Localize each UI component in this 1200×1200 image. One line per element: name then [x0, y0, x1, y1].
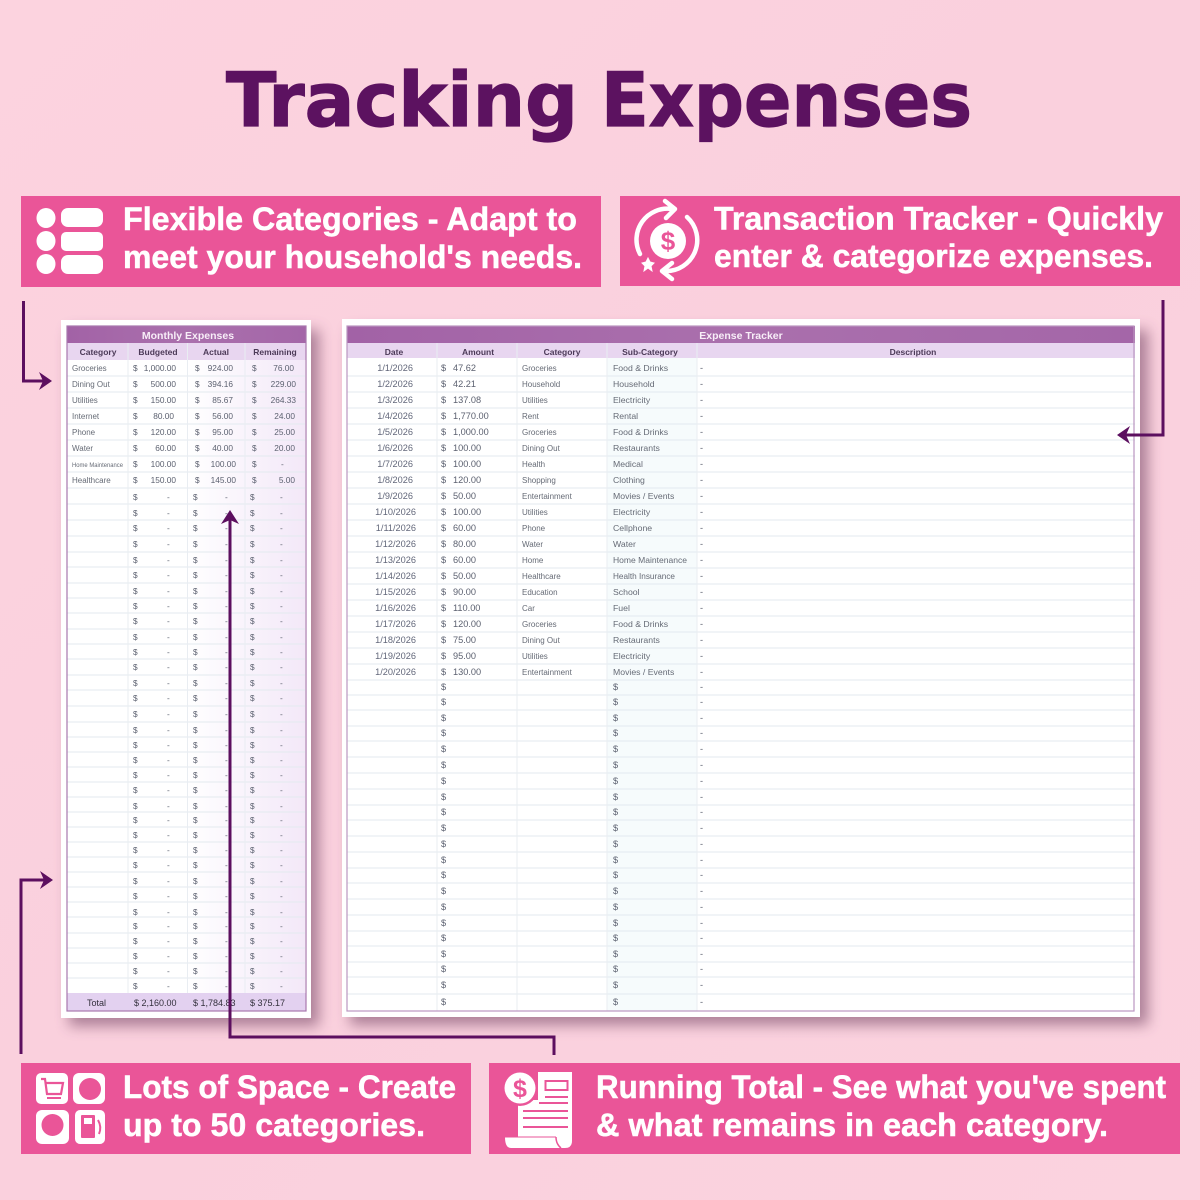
table rows: transactions: Utilities	[522, 508, 548, 517]
table rows: empty transaction slots: $$-	[441, 870, 703, 880]
banner text: lots of space: Lots of Space - Create	[123, 1069, 456, 1105]
table rows: transactions: 130.00	[453, 667, 481, 677]
arrow: lots of space to monthly table	[21, 871, 53, 1054]
table rows: transactions: Electricity	[613, 651, 651, 661]
table rows: transactions: -	[700, 555, 703, 565]
table rows: categories with amounts: 394.16	[208, 379, 233, 389]
table rows: transactions: $	[441, 587, 446, 597]
table rows: transactions: Restaurants	[613, 635, 660, 645]
table rows: empty transaction slots: $$-	[441, 933, 703, 943]
table rows: empty category slots: $-$-$-	[133, 936, 283, 946]
table rows: categories with amounts: $$$	[133, 443, 257, 453]
table rows: transactions: Household	[613, 379, 655, 389]
table rows: transactions: 1/18/2026	[375, 635, 416, 645]
table rows: categories with amounts: Healthcare	[72, 476, 111, 485]
panel: monthly expenses table	[61, 320, 319, 1026]
table rows: transactions: Food & Drinks	[613, 619, 669, 629]
panel: running total banner	[489, 1063, 1180, 1154]
table rows: transactions: -	[700, 411, 703, 421]
table rows: transactions: $	[441, 379, 446, 389]
table rows: categories with amounts: 100.00	[211, 459, 236, 469]
table rows: transactions: $	[441, 363, 446, 373]
table rows: empty category slots: $-$-$-	[133, 678, 283, 688]
table rows: transactions: -	[700, 443, 703, 453]
table rows: transactions: -	[700, 507, 703, 517]
banner text: transaction tracker	[714, 200, 1163, 274]
table rows: categories with amounts: Internet	[72, 412, 100, 421]
table rows: transactions: 1/13/2026	[375, 555, 416, 565]
icon: receipt with coin: $	[513, 1075, 527, 1103]
table rows: categories with amounts: 25.00	[274, 427, 295, 437]
table rows: transactions: 1/12/2026	[375, 539, 416, 549]
table rows: transactions: 1/11/2026	[376, 523, 416, 533]
table rows: categories with amounts	[72, 363, 296, 485]
table rows: empty category slots: $-$-$-	[133, 876, 283, 886]
table rows: empty transaction slots: $$-	[441, 997, 703, 1007]
banner text: running total	[596, 1069, 1166, 1143]
table rows: empty category slots	[133, 492, 283, 991]
banner text: lots of space: up to 50 categories.	[123, 1107, 425, 1143]
table rows: transactions: 100.00	[453, 443, 481, 453]
table rows: transactions: 80.00	[453, 539, 476, 549]
table rows: empty transaction slots: $$-	[441, 886, 703, 896]
table rows: transactions: $	[441, 667, 446, 677]
table rows: categories with amounts: $$$-	[133, 459, 284, 469]
table rows: empty category slots: $-$-$-	[133, 662, 283, 672]
table rows: categories with amounts: 60.00	[155, 443, 176, 453]
table rows: transactions: Fuel	[613, 603, 630, 613]
panel: flexible categories banner	[21, 196, 601, 287]
table rows: categories with amounts: 150.00	[151, 395, 176, 405]
banner text: running total: Running Total - See what you've spent	[596, 1069, 1166, 1105]
icon: circular dollar arrows	[636, 201, 697, 279]
table rows: categories with amounts: Utilities	[72, 396, 98, 405]
table rows: empty transaction slots: $$-	[441, 697, 703, 707]
table rows: transactions: -	[700, 635, 703, 645]
table header row: Category	[80, 347, 117, 357]
table rows: transactions: 1/6/2026	[377, 443, 413, 453]
table header row	[67, 343, 306, 360]
table rows: transactions: $	[441, 523, 446, 533]
table rows: empty category slots: $-$-$-	[133, 830, 283, 840]
table rows: categories with amounts: 150.00	[151, 475, 176, 485]
table rows: transactions: -	[700, 363, 703, 373]
banner text: flexible categories: Flexible Categories - Adapt to	[123, 201, 577, 237]
table rows: transactions: 1/17/2026	[375, 619, 416, 629]
table rows: transactions: -	[700, 539, 703, 549]
table rows: transactions: 95.00	[453, 651, 476, 661]
table rows: transactions: 1/7/2026	[377, 459, 413, 469]
table rows: categories with amounts: 264.33	[271, 395, 296, 405]
banner text: running total: & what remains in each category.	[596, 1107, 1108, 1143]
table rows: transactions: Health	[522, 460, 545, 469]
table rows: empty transaction slots: $$-	[441, 980, 703, 990]
table rows: transactions: -	[700, 379, 703, 389]
icon: list	[36, 208, 103, 274]
table rows: empty category slots: $-$-$-	[133, 693, 283, 703]
table rows: transactions: Restaurants	[613, 443, 660, 453]
panel: expense tracker table	[342, 319, 1148, 1025]
table rows: transactions: 1/8/2026	[377, 475, 413, 485]
table title: expense tracker: Expense Tracker	[699, 330, 783, 342]
table rows: transactions: School	[613, 587, 640, 597]
title: Tracking	[226, 56, 578, 144]
table rows: transactions: -	[700, 427, 703, 437]
table rows: transactions: -	[700, 491, 703, 501]
table rows: categories with amounts: 120.00	[151, 427, 176, 437]
table rows: transactions: 1/2/2026	[377, 379, 413, 389]
table rows: transactions: 120.00	[453, 619, 481, 629]
table total row: Total	[87, 998, 106, 1008]
table rows: empty transaction slots	[441, 682, 703, 1007]
table rows: empty category slots: $-$-$-	[133, 815, 283, 825]
title	[226, 56, 972, 144]
table rows: empty category slots: $-$-$-	[133, 740, 283, 750]
table rows: empty transaction slots: $$-	[441, 964, 703, 974]
table rows: transactions: Electricity	[613, 395, 651, 405]
table rows: categories with amounts: Water	[72, 444, 93, 453]
table rows: transactions: 1,000.00	[453, 427, 489, 437]
table rows: categories with amounts: $$$	[133, 379, 257, 389]
table rows: transactions: 60.00	[453, 555, 476, 565]
table rows: transactions: Dining Out	[522, 444, 561, 453]
table rows: transactions: -	[700, 603, 703, 613]
table rows: empty transaction slots: $$-	[441, 744, 703, 754]
table rows: categories with amounts: 100.00	[151, 459, 176, 469]
table rows: transactions: Electricity	[613, 507, 651, 517]
table rows: categories with amounts: 76.00	[273, 363, 294, 373]
table header row: Category	[544, 347, 581, 357]
table rows: transactions: -	[700, 395, 703, 405]
table rows: empty transaction slots: $$-	[441, 807, 703, 817]
table rows: categories with amounts: $$$	[133, 411, 257, 421]
table rows: transactions: -	[700, 571, 703, 581]
table rows: empty transaction slots: $$-	[441, 792, 703, 802]
table rows: transactions: Groceries	[522, 428, 557, 437]
table rows: transactions	[375, 363, 703, 677]
table rows: transactions: Medical	[613, 459, 643, 469]
table rows: empty transaction slots: $$-	[441, 902, 703, 912]
banner text: flexible categories	[123, 201, 582, 275]
table rows: transactions: Clothing	[613, 475, 645, 485]
table rows: empty category slots: $-$-$-	[133, 860, 283, 870]
table rows: transactions: 120.00	[453, 475, 481, 485]
table rows: transactions: $	[441, 443, 446, 453]
table rows: transactions: 1/1/2026	[377, 363, 413, 373]
table rows: empty category slots: $-$-$-	[133, 891, 283, 901]
table rows: transactions: 60.00	[453, 523, 476, 533]
table rows: transactions: $	[441, 603, 446, 613]
table rows: empty transaction slots: $$-	[441, 918, 703, 928]
table rows: transactions: Utilities	[522, 396, 548, 405]
table rows: transactions: 42.21	[453, 379, 476, 389]
table rows: transactions: 1/3/2026	[377, 395, 413, 405]
table title: monthly expenses	[67, 326, 306, 343]
table rows: transactions: Shopping	[522, 476, 556, 485]
table rows: categories with amounts: 924.00	[208, 363, 233, 373]
table total row: $ 2,160.00	[134, 998, 177, 1008]
table rows: transactions: Home Maintenance	[613, 555, 687, 565]
table rows: transactions: $	[441, 459, 446, 469]
table title: monthly expenses: Monthly Expenses	[142, 330, 234, 342]
table rows: transactions: $	[441, 571, 446, 581]
table rows: empty transaction slots: $$-	[441, 949, 703, 959]
table rows: empty category slots: $-$-$-	[133, 570, 283, 580]
table rows: empty category slots: $-$-$-	[133, 492, 283, 502]
table rows: transactions: -	[700, 459, 703, 469]
table rows: empty category slots: $-$-$-	[133, 647, 283, 657]
table rows: transactions: -	[700, 619, 703, 629]
table rows: empty category slots: $-$-$-	[133, 508, 283, 518]
table rows: categories with amounts: 1,000.00	[144, 363, 176, 373]
table rows: transactions: 1/15/2026	[375, 587, 416, 597]
table rows: transactions: 1/4/2026	[377, 411, 413, 421]
table rows: transactions: $	[441, 619, 446, 629]
table rows: empty category slots: $-$-$-	[133, 785, 283, 795]
table rows: categories with amounts: 24.00	[274, 411, 295, 421]
title: Expenses	[601, 56, 972, 144]
table rows: transactions: Water	[522, 540, 543, 549]
table rows: categories with amounts: 85.67	[212, 395, 233, 405]
table rows: empty category slots: $-$-$-	[133, 601, 283, 611]
table rows: transactions: 1/20/2026	[375, 667, 416, 677]
table rows: transactions: $	[441, 635, 446, 645]
table rows: transactions: $	[441, 475, 446, 485]
table rows: categories with amounts: 56.00	[212, 411, 233, 421]
table rows: empty category slots: $-$-$-	[133, 845, 283, 855]
table rows: empty transaction slots: $$-	[441, 760, 703, 770]
table rows: transactions: Groceries	[522, 364, 557, 373]
table rows: transactions: 1/5/2026	[377, 427, 413, 437]
table rows: categories with amounts: 95.00	[212, 427, 233, 437]
table header row	[347, 343, 1135, 358]
table rows: categories with amounts: 80.00	[153, 411, 174, 421]
table rows: transactions: 75.00	[453, 635, 476, 645]
table rows: transactions: 1,770.00	[453, 411, 489, 421]
arrow: running total to actual column	[221, 510, 554, 1055]
table rows: transactions: 90.00	[453, 587, 476, 597]
table rows: transactions: Food & Drinks	[613, 427, 669, 437]
table rows: transactions: Movies / Events	[613, 491, 675, 501]
banner text: lots of space	[123, 1069, 456, 1143]
table rows: transactions: Health Insurance	[613, 571, 675, 581]
table rows: transactions: $	[441, 651, 446, 661]
table rows: empty transaction slots: $$-	[441, 682, 703, 692]
table rows: empty transaction slots: $$-	[441, 823, 703, 833]
table rows: categories with amounts: Home Maintenance	[72, 463, 124, 469]
table rows: empty transaction slots: $$-	[441, 839, 703, 849]
table header row: Remaining	[253, 347, 297, 357]
table rows: empty category slots: $-$-$-	[133, 586, 283, 596]
table rows: transactions: 1/10/2026	[375, 507, 416, 517]
table rows: transactions: $	[441, 555, 446, 565]
table rows: categories with amounts: $$$	[133, 427, 257, 437]
table rows: empty category slots: $-$-$-	[133, 801, 283, 811]
arrow: flexible categories to monthly table	[24, 301, 52, 390]
table rows: transactions: 1/19/2026	[375, 651, 416, 661]
table rows: transactions: 100.00	[453, 459, 481, 469]
table rows: transactions: Car	[522, 604, 535, 613]
table rows: transactions: 1/16/2026	[375, 603, 416, 613]
arrow: transaction tracker to expense table	[1117, 300, 1163, 444]
table rows: categories with amounts: 5.00	[279, 475, 295, 485]
table rows: transactions: Entertainment	[522, 668, 573, 677]
table rows: categories with amounts: 145.00	[211, 475, 236, 485]
table rows: transactions: $	[441, 427, 446, 437]
table rows: transactions: $	[441, 411, 446, 421]
table header row: Description	[890, 347, 936, 357]
table rows: transactions: 50.00	[453, 571, 476, 581]
table rows: empty category slots: $-$-$-	[133, 966, 283, 976]
table rows: transactions: Dining Out	[522, 636, 561, 645]
table rows: empty transaction slots: $$-	[441, 728, 703, 738]
icon: circular dollar arrows: $	[661, 226, 676, 256]
table header row: Budgeted	[138, 347, 178, 357]
table rows: transactions: Rental	[613, 411, 638, 421]
table rows: transactions: Home	[522, 556, 544, 565]
table rows: transactions: 50.00	[453, 491, 476, 501]
table rows: categories with amounts: 40.00	[212, 443, 233, 453]
table rows: empty category slots: $-$-$-	[133, 725, 283, 735]
table rows: transactions: Cellphone	[613, 523, 652, 533]
banner text: transaction tracker: Transaction Tracker - Quickly	[714, 200, 1163, 236]
table rows: empty category slots: $-$-$-	[133, 770, 283, 780]
table rows: transactions: 1/9/2026	[377, 491, 413, 501]
table header row: Date	[385, 347, 403, 357]
table rows: transactions: 137.08	[453, 395, 481, 405]
table rows: categories with amounts: Dining Out	[72, 380, 111, 389]
table rows: transactions: Groceries	[522, 620, 557, 629]
table rows: transactions: $	[441, 539, 446, 549]
table rows: empty category slots: $-$-$-	[133, 981, 283, 991]
table rows: empty transaction slots: $$-	[441, 855, 703, 865]
table total row: $ 1,784.83	[193, 998, 236, 1008]
table header row: Sub-Category	[622, 347, 678, 357]
table rows: transactions: 110.00	[453, 603, 480, 613]
panel: transaction tracker banner	[620, 196, 1180, 286]
banner text: transaction tracker: enter & categorize expenses.	[714, 238, 1153, 274]
table rows: transactions: Healthcare	[522, 572, 561, 581]
table rows: transactions: Utilities	[522, 652, 548, 661]
table rows: transactions: 1/14/2026	[375, 571, 416, 581]
table rows: transactions: -	[700, 667, 703, 677]
banner text: flexible categories: meet your household's needs.	[123, 239, 582, 275]
table title: expense tracker	[347, 326, 1135, 343]
panel: lots of space banner	[21, 1063, 471, 1154]
icon: category tiles	[36, 1073, 105, 1144]
table rows: transactions: 100.00	[453, 507, 481, 517]
table rows: empty category slots: $-$-$-	[133, 539, 283, 549]
table rows: categories with amounts: 229.00	[271, 379, 296, 389]
table header row: Amount	[462, 347, 494, 357]
table rows: categories with amounts: 500.00	[151, 379, 176, 389]
table rows: transactions: Water	[613, 539, 636, 549]
table rows: transactions: $	[441, 395, 446, 405]
table rows: empty category slots: $-$-$-	[133, 951, 283, 961]
table rows: transactions: $	[441, 491, 446, 501]
table rows: categories with amounts: Groceries	[72, 364, 107, 373]
table rows: transactions: Household	[522, 380, 560, 389]
table rows: categories with amounts: $$$	[133, 475, 257, 485]
table rows: transactions: Entertainment	[522, 492, 573, 501]
table rows: categories with amounts: Phone	[72, 428, 96, 437]
table rows: empty category slots: $-$-$-	[133, 755, 283, 765]
table rows: empty category slots: $-$-$-	[133, 709, 283, 719]
table rows: transactions: -	[700, 475, 703, 485]
table rows: transactions: $	[441, 507, 446, 517]
table total row: $ 375.17	[250, 998, 285, 1008]
table rows: empty category slots: $-$-$-	[133, 632, 283, 642]
table rows: transactions: Education	[522, 588, 558, 597]
table rows: transactions: Phone	[522, 524, 546, 533]
table rows: empty transaction slots: $$-	[441, 713, 703, 723]
table rows: transactions: Movies / Events	[613, 667, 675, 677]
table rows: empty category slots: $-$-$-	[133, 907, 283, 917]
table rows: empty category slots: $-$-$-	[133, 523, 283, 533]
icon: receipt with coin	[502, 1070, 572, 1148]
table rows: categories with amounts: $$$	[133, 395, 257, 405]
table rows: categories with amounts: 20.00	[274, 443, 295, 453]
table rows: transactions: -	[700, 587, 703, 597]
table rows: empty category slots: $-$-$-	[133, 921, 283, 931]
table total row	[67, 993, 306, 1011]
table rows: transactions: Food & Drinks	[613, 363, 669, 373]
table rows: transactions: Rent	[522, 412, 540, 421]
table header row: Actual	[203, 347, 229, 357]
table rows: categories with amounts: $$$	[133, 363, 257, 373]
table rows: empty category slots: $-$-$-	[133, 555, 283, 565]
table rows: transactions: -	[700, 651, 703, 661]
table rows: empty category slots: $-$-$-	[133, 616, 283, 626]
table rows: empty transaction slots: $$-	[441, 776, 703, 786]
table rows: transactions: 47.62	[453, 363, 476, 373]
table rows: transactions: -	[700, 523, 703, 533]
